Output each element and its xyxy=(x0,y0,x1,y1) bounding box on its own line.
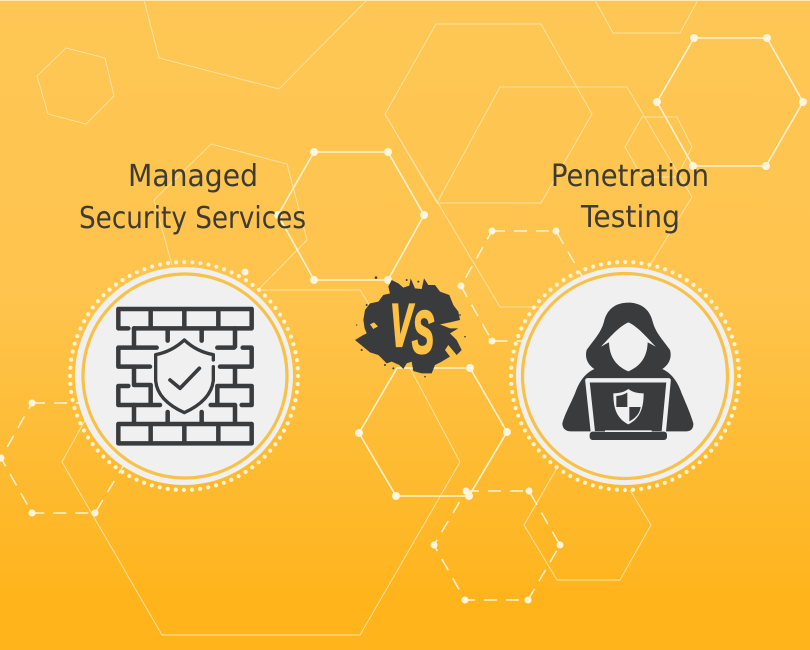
heading: Managed Security Services xyxy=(79,159,306,236)
heading: Penetration Testing: Testing xyxy=(580,200,680,235)
heading: Penetration Testing: Penetration xyxy=(551,159,709,194)
vs lettering: S xyxy=(412,300,434,367)
heading: Managed Security Services: Security Services xyxy=(79,201,306,236)
heading: Penetration Testing xyxy=(551,159,709,235)
vs badge xyxy=(355,276,466,377)
icon: hooded hacker with laptop xyxy=(562,303,693,440)
dashed hexagons xyxy=(1,231,590,600)
heading: Managed Security Services: Managed xyxy=(128,159,258,194)
thin hexagon outlines xyxy=(37,0,698,635)
ink splat xyxy=(355,276,466,377)
vs lettering: V xyxy=(390,293,412,360)
icon: brick wall with shield xyxy=(118,309,252,443)
badge: left circle xyxy=(70,262,298,490)
badge: right circle xyxy=(511,262,739,490)
bright hexagons with nodes xyxy=(278,38,803,496)
